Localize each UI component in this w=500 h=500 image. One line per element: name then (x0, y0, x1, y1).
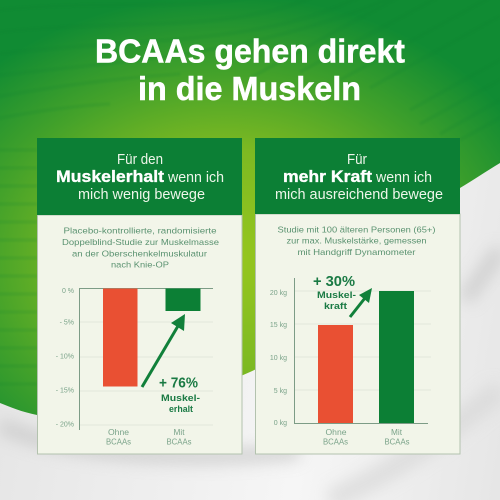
bar: mit BCAAs (166, 288, 200, 311)
bar chart left: - 10% (56, 354, 74, 360)
study description left: Placebo-kontrollierte, randomisierte (64, 226, 217, 236)
header left (37, 138, 242, 215)
callout: +30%: Muskel- (317, 290, 356, 300)
study description left (62, 226, 219, 270)
header right (255, 138, 460, 214)
axis labels left: BCAAs (166, 436, 192, 446)
bar chart left: - 20% (56, 422, 74, 428)
title: BCAAs gehen direkt (95, 34, 405, 70)
header right: mich ausreichend bewege (275, 187, 443, 203)
header right: Für (347, 152, 367, 168)
bar chart right: 15 kg (270, 322, 287, 329)
arrow: up left (142, 314, 185, 387)
study description left: Doppelblind-Studie zur Muskelmasse (62, 237, 219, 247)
bar chart right: 20 kg (270, 290, 287, 297)
axis labels left: Ohne (108, 427, 129, 437)
callout: +76% (159, 374, 200, 414)
title (95, 34, 405, 108)
callout: +76%: Muskel- (161, 393, 200, 403)
title: in die Muskeln (138, 71, 361, 108)
panel body right (256, 214, 460, 454)
axis labels right: Mit (391, 427, 403, 437)
callout: +76%: + 76% (159, 374, 198, 392)
bar chart left: - 5% (60, 320, 74, 326)
header left: mich wenig bewege (78, 187, 205, 203)
callout: +30% (313, 273, 356, 311)
axis labels right: BCAAs (323, 436, 348, 446)
study description left: nach Knie-OP (111, 260, 169, 270)
bar: ohne BCAAs (318, 325, 353, 423)
panel: mehr Kraft (255, 138, 460, 454)
arrow: up right (350, 288, 372, 317)
panel body left (38, 215, 242, 454)
header left: wenn ich (167, 170, 224, 186)
bar chart left: - 15% (56, 388, 74, 394)
axis labels right: BCAAs (384, 436, 410, 446)
axis labels left: BCAAs (106, 436, 131, 446)
study description right: Studie mit 100 älteren Personen (65+) (278, 224, 436, 234)
study description right (278, 224, 436, 257)
bar chart left: 0 % (62, 288, 74, 295)
callout: +76%: erhalt (169, 404, 193, 414)
panel: Muskelerhalt (37, 138, 242, 454)
axis labels left (106, 427, 192, 446)
bar: ohne BCAAs (103, 288, 138, 386)
bar chart right: 5 kg (274, 388, 287, 395)
study description right: zur max. Muskelstärke, gemessen (286, 236, 427, 246)
callout: +30%: kraft (324, 301, 347, 311)
header left: Für den (117, 152, 163, 168)
study description left: an der Oberschenkelmuskulatur (72, 248, 207, 258)
header left: Muskelerhalt (56, 167, 164, 186)
axis labels right (323, 427, 410, 446)
axis labels left: Mit (174, 427, 185, 437)
bar chart left (56, 288, 213, 446)
header right: wenn ich (375, 170, 432, 186)
study description right: mit Handgriff Dynamometer (298, 247, 416, 257)
bar chart right (270, 273, 431, 446)
header right: mehr Kraft (283, 167, 372, 186)
bar: mit BCAAs (379, 291, 414, 423)
callout: +30%: + 30% (313, 273, 355, 290)
bar chart right: 0 kg (274, 420, 287, 427)
bar chart right: 10 kg (270, 355, 287, 362)
axis labels right: Ohne (326, 427, 347, 437)
